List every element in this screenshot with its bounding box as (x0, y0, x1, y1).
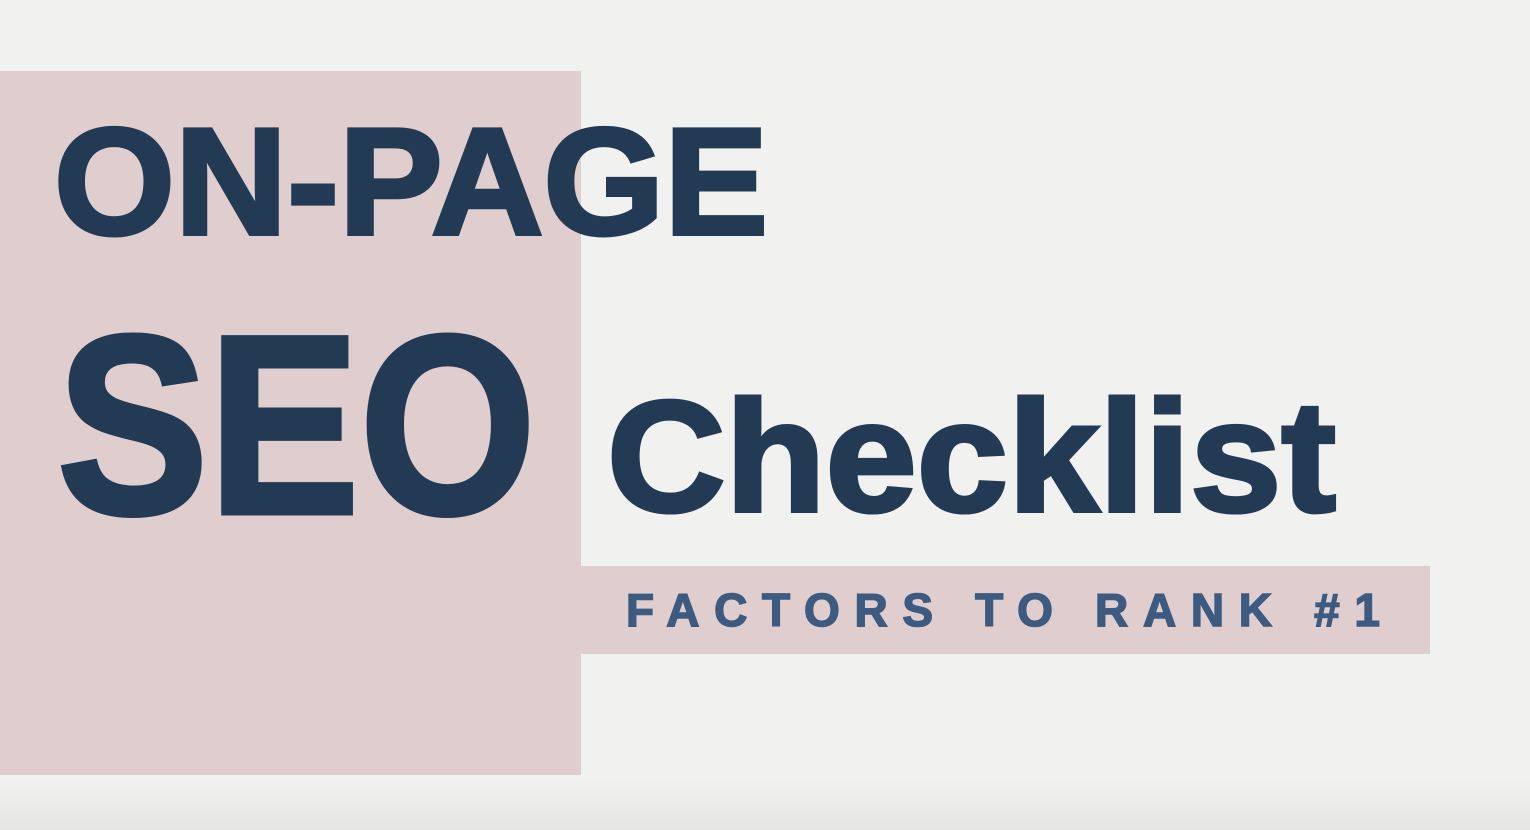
title: ON-PAGE: ON-PAGE (54, 97, 768, 267)
subtitle text: FACTORS TO RANK #1 (626, 584, 1380, 636)
panel: subtitle bar (581, 566, 1430, 654)
title: Checklist: Checklist (607, 369, 1336, 545)
title: SEO: SEO (57, 283, 536, 568)
panel: pink block left (0, 71, 581, 775)
